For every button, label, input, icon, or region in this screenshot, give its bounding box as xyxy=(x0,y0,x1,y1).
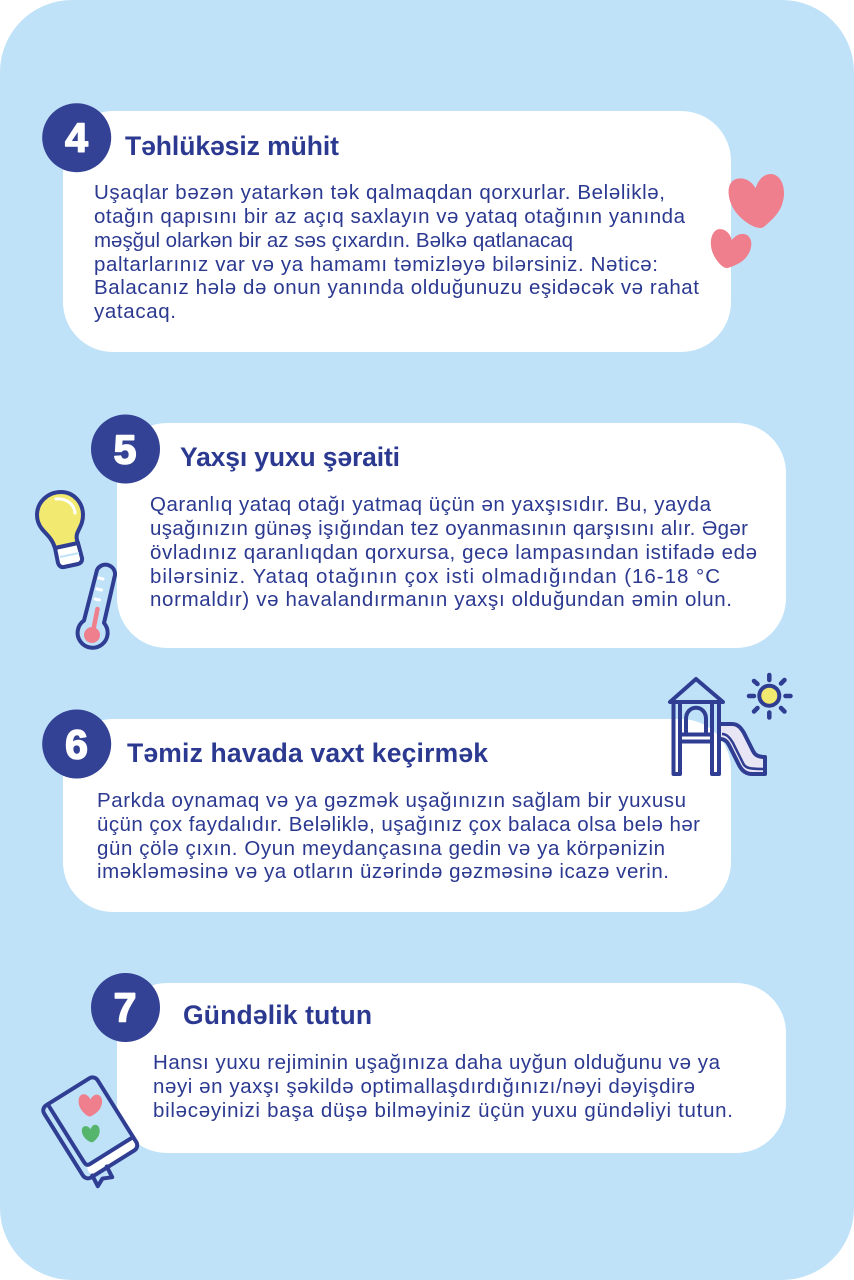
body text 4: yatacaq. xyxy=(94,300,176,323)
number badge 4: 4 xyxy=(65,114,88,160)
body text 7: biləcəyinizi başa düşə bilməyiniz üçün yuxu gündəliyi tutun. xyxy=(153,1099,733,1122)
body text 7 xyxy=(153,1051,733,1122)
panel: 7 keep a diary xyxy=(91,973,786,1153)
card 7 background xyxy=(117,983,786,1153)
body text 7: nəyi ən yaxşı şəkildə optimallaşdırdığınızı/nəyi dəyişdirə xyxy=(153,1075,695,1098)
body text 5: normaldır) və havalandırmanın yaxşı olduğundan əmin olun. xyxy=(150,588,732,611)
number badge 5: 5 xyxy=(114,426,136,472)
panel: 5 good sleep conditions xyxy=(91,414,786,648)
body text 4: Uşaqlar bəzən yatarkən tək qalmaqdan qorxurlar. Beləliklə, xyxy=(94,181,665,204)
icon: playground slide xyxy=(670,679,765,774)
body text 5: uşağınızın günəş işığından tez oyanmasının qarşısını alır. Əgər xyxy=(150,517,748,540)
body text 6: üçün çox faydalıdır. Beləliklə, uşağınız çox balaca olsa belə hər xyxy=(97,813,700,836)
number badge 4 xyxy=(42,103,111,172)
heading 4: Təhlükəsiz mühit xyxy=(125,131,339,161)
body text 4: otağın qapısını bir az açıq saxlayın və yataq otağının yanında xyxy=(94,205,686,228)
number badge 6: 6 xyxy=(65,722,88,768)
card 6 background xyxy=(63,719,731,912)
body text 5: Qaranlıq yataq otağı yatmaq üçün ən yaxşısıdır. Bu, yayda xyxy=(150,493,712,516)
body text 4: Balacanız hələ də onun yanında olduğunuzu eşidəcək və rahat xyxy=(94,276,699,299)
icon: light bulb xyxy=(37,492,83,567)
heading 5: Yaxşı yuxu şəraiti xyxy=(180,442,400,472)
panel: 6 fresh air xyxy=(42,710,731,912)
number badge 7 xyxy=(91,973,160,1042)
number badge 6 xyxy=(42,710,111,778)
body text 6: gün çölə çıxın. Oyun meydançasına gedin və ya körpənizin xyxy=(97,837,665,860)
body text 5: bilərsiniz. Yataq otağının çox isti olmadığından (16-18 °C xyxy=(150,565,720,588)
card 5 background xyxy=(117,423,786,648)
body text 4 xyxy=(94,181,699,323)
body text 4: məşğul olarkən bir az səs çıxardın. Bəlkə qatlanacaq xyxy=(94,229,573,252)
number badge 5 xyxy=(91,414,160,484)
body text 7: Hansı yuxu rejiminin uşağınıza daha uyğun olduğunu və ya xyxy=(153,1051,721,1074)
body text 5 xyxy=(150,493,757,611)
icon: diary book xyxy=(41,1075,145,1190)
icon: hearts xyxy=(705,173,788,273)
heading 6: Təmiz havada vaxt keçirmək xyxy=(127,738,488,768)
icon: thermometer xyxy=(78,565,115,648)
body text 4: paltarlarınız var və ya hamamı təmizləyə bilərsiniz. Nəticə: xyxy=(94,253,658,276)
body text 6: iməkləməsinə və ya otların üzərində gəzməsinə icazə verin. xyxy=(97,860,669,883)
number badge 7: 7 xyxy=(114,984,136,1030)
body text 5: övladınız qaranlıqdan qorxursa, gecə lampasından istifadə edə xyxy=(150,541,757,564)
body text 6: Parkda oynamaq və ya gəzmək uşağınızın sağlam bir yuxusu xyxy=(97,789,686,812)
body text 6 xyxy=(97,789,700,883)
icon: sun xyxy=(749,675,790,718)
panel: 4 safe environment xyxy=(42,103,731,352)
heading 7: Gündəlik tutun xyxy=(183,1000,372,1030)
card 4 background xyxy=(63,111,731,352)
